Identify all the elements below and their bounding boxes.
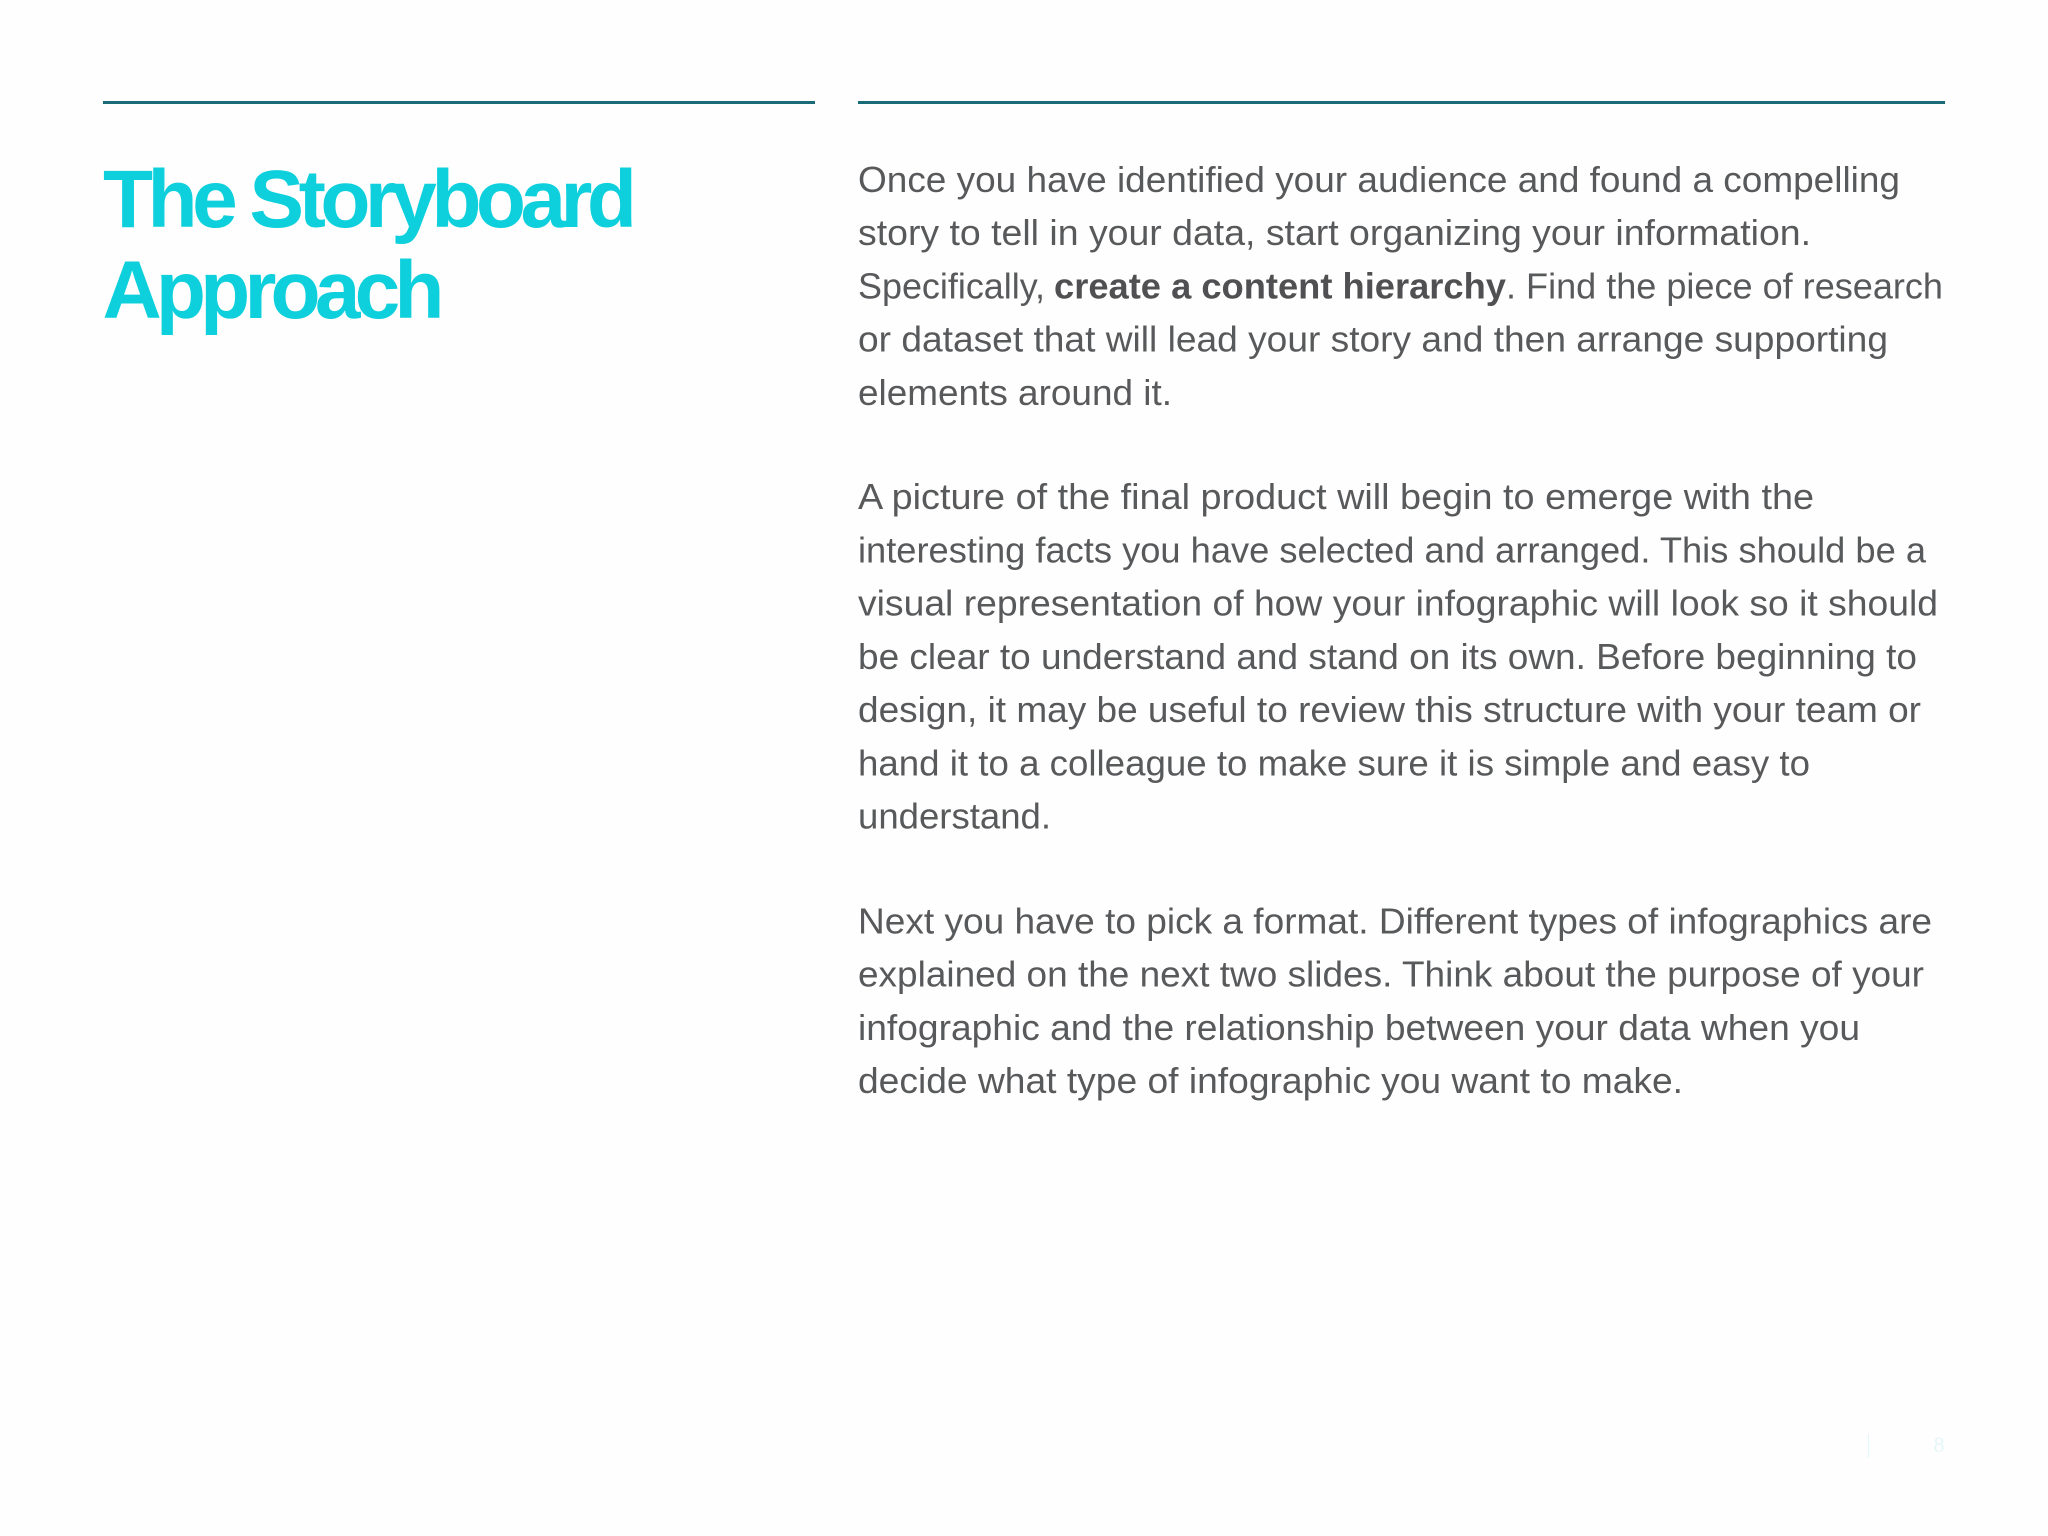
paragraph 1: Once you have identified your audience and found a compelling — [858, 159, 1900, 200]
paragraph 2: be clear to understand and stand on its own. Before beginning to — [858, 636, 1917, 677]
paragraph 1: or dataset that will lead your story and then arrange supporting — [858, 319, 1888, 360]
paragraph 2: A picture of the final product will begin to emerge with the — [858, 476, 1814, 517]
paragraph 3: Next you have to pick a format. Different types of infographics are — [858, 900, 1932, 942]
right column rule — [858, 101, 1945, 104]
paragraph 2: understand. — [858, 796, 1051, 836]
paragraph 3: explained on the next two slides. Think about the purpose of your — [858, 954, 1924, 994]
left column rule — [103, 101, 815, 104]
paragraph 3 — [858, 900, 1932, 1101]
paragraph 2: design, it may be useful to review this structure with your team or — [858, 689, 1921, 730]
paragraph 2: interesting facts you have selected and arranged. This should be a — [858, 530, 1927, 570]
paragraph 3: decide what type of infographic you want to make. — [858, 1060, 1683, 1101]
title: Approach — [102, 245, 444, 336]
paragraph 1: Specifically, — [858, 266, 1045, 306]
paragraph 1: elements around it. — [858, 372, 1172, 413]
page number divider — [1868, 1434, 1869, 1458]
paragraph 2: visual representation of how your infographic will look so it should — [858, 583, 1938, 624]
title: The Storyboard — [103, 154, 637, 245]
paragraph 1: create a content hierarchy — [1054, 266, 1506, 306]
page number: 8 — [1934, 1432, 1944, 1457]
paragraph 3: infographic and the relationship between your data when you — [858, 1007, 1860, 1048]
title — [102, 154, 637, 336]
paragraph 1: story to tell in your data, start organizing your information. — [858, 212, 1811, 253]
paragraph 2: hand it to a colleague to make sure it is simple and easy to — [858, 742, 1810, 784]
paragraph 2 — [858, 476, 1938, 836]
paragraph 1 — [858, 159, 1943, 413]
paragraph 1: . Find the piece of research — [1506, 266, 1943, 306]
